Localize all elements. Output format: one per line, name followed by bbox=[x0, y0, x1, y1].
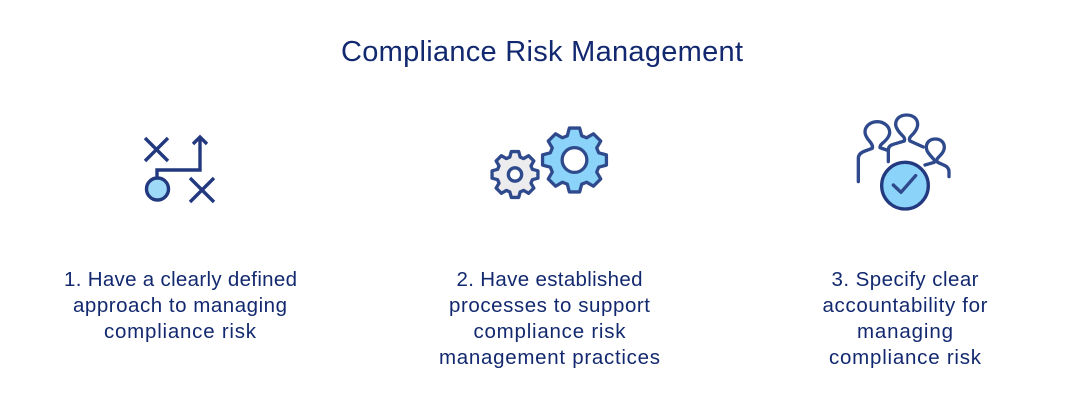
icon: team with check bbox=[858, 115, 949, 209]
step 2 text: 2. Have established bbox=[456, 268, 642, 291]
title: Compliance Risk Management bbox=[341, 36, 743, 68]
icon: strategy plan bbox=[145, 137, 214, 202]
step 1 text: compliance risk bbox=[104, 320, 257, 343]
step 3 text: 3. Specify clear bbox=[832, 268, 979, 291]
step 3 text: managing bbox=[857, 320, 953, 343]
panel: step 3 bbox=[822, 115, 988, 369]
step 1 text bbox=[64, 268, 297, 343]
icon: gears bbox=[492, 128, 606, 197]
step 3 text: compliance risk bbox=[829, 346, 982, 369]
step 1 text: approach to managing bbox=[73, 294, 287, 317]
step 3 text: accountability for bbox=[822, 294, 988, 317]
step 2 text: processes to support bbox=[449, 294, 650, 317]
step 1 text: 1. Have a clearly defined bbox=[64, 268, 297, 291]
small gear bbox=[492, 152, 538, 197]
step 2 text: compliance risk bbox=[474, 320, 626, 343]
large gear bbox=[543, 128, 606, 192]
step 3 text bbox=[822, 268, 988, 369]
panel: step 1 bbox=[64, 137, 297, 343]
step 2 text bbox=[439, 268, 660, 369]
step 2 text: management practices bbox=[439, 346, 660, 369]
panel: step 2 bbox=[439, 128, 660, 369]
